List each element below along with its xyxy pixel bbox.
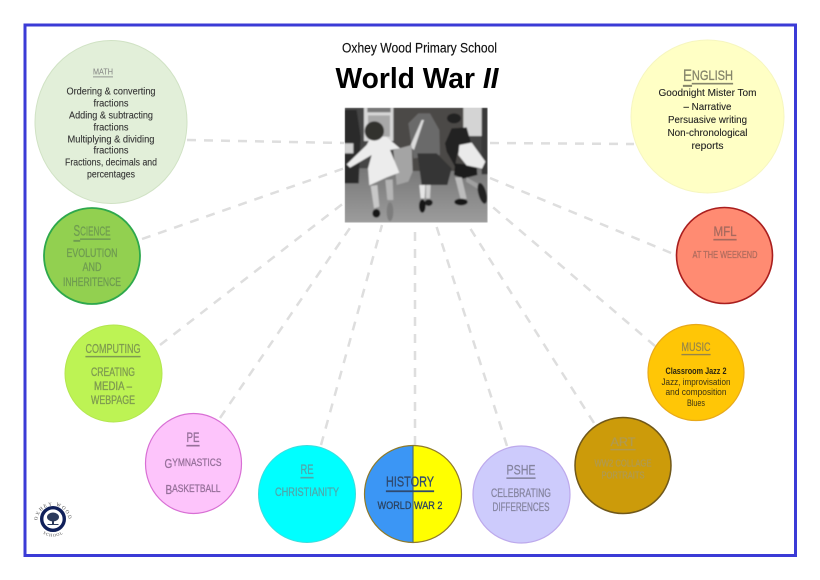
english topics: Non-chronological	[668, 127, 748, 139]
panel: pe	[146, 414, 242, 514]
mfl heading: MFL	[714, 223, 737, 239]
pshe heading: PSHE	[506, 462, 536, 478]
pe heading: PE	[186, 429, 200, 445]
english heading: ENGLISH	[683, 66, 733, 84]
pe topics	[164, 456, 222, 496]
math topics: fractions	[94, 146, 128, 156]
panel: music	[648, 324, 744, 420]
panel: history	[364, 446, 462, 542]
math topics: fractions	[94, 98, 128, 110]
pe topics: GYMNASTICS	[164, 456, 222, 470]
main title: World War II	[336, 63, 499, 95]
english topics: Persuasive writing	[668, 114, 747, 126]
math topics: Ordering & converting	[66, 86, 156, 98]
panel: pshe	[473, 446, 570, 543]
music topics: and composition	[666, 387, 726, 397]
panel: science	[44, 208, 140, 304]
art topic: WW2 COLLAGE	[594, 458, 652, 470]
math topics: Adding & subtracting	[69, 110, 153, 122]
panel: math	[35, 40, 187, 204]
panel: art	[575, 418, 671, 514]
math heading: MATH	[93, 68, 113, 76]
music topics: Blues	[687, 398, 705, 408]
mfl topic: AT THE WEEKEND	[692, 249, 758, 261]
pshe topic: CELEBRATING	[491, 488, 551, 500]
music heading: MUSIC	[682, 342, 710, 354]
science topic: EVOLUTION	[66, 248, 118, 260]
computing topic	[91, 367, 135, 407]
science topic: AND	[82, 262, 102, 274]
math topics: Multiplying & dividing	[68, 134, 154, 146]
icon: school logo: OXHEY WOOD	[34, 502, 72, 520]
music topics: Jazz, improvisation	[662, 377, 730, 387]
science topic	[63, 248, 121, 289]
science topic: INHERITENCE	[63, 277, 121, 289]
pshe topic: DIFFERENCES	[492, 502, 550, 514]
math topics	[65, 86, 157, 180]
school name heading: Oxhey Wood Primary School	[342, 40, 497, 56]
computing topic: MEDIA –	[94, 381, 132, 393]
computing topic: WEBPAGE	[91, 395, 135, 407]
dashed connector lines	[142, 140, 676, 446]
icon: school logo: SCHOOL	[43, 532, 62, 537]
computing heading: COMPUTING	[86, 342, 140, 356]
music topics: Classroom Jazz 2	[666, 366, 726, 376]
pshe topic	[491, 488, 551, 514]
english topics: Goodnight Mister Tom	[658, 87, 757, 99]
icon: school logo	[34, 502, 72, 537]
science heading: SCIENCE	[74, 222, 111, 240]
art topic	[594, 458, 652, 482]
history heading: HISTORY	[386, 474, 434, 490]
english topics: – Narrative	[684, 101, 732, 113]
panel: computing	[65, 325, 162, 422]
music topics	[662, 366, 730, 408]
history topic: WORLD WAR 2	[378, 500, 442, 512]
panel: mfl	[676, 208, 772, 304]
art heading: ART	[610, 435, 636, 449]
panel: re	[258, 446, 356, 542]
computing topic: CREATING	[91, 367, 135, 379]
art topic: PORTRAITS	[602, 470, 645, 482]
math topics: fractions	[94, 122, 128, 134]
math topics: Fractions, decimals and	[65, 158, 157, 168]
pe topics: BASKETBALL	[166, 482, 220, 496]
re topic: CHRISTIANITY	[275, 487, 339, 499]
re heading: RE	[300, 461, 314, 477]
photo: evacuee children running	[345, 108, 489, 223]
math topics: percentages	[87, 170, 135, 180]
english topics	[658, 87, 757, 152]
english topics: reports	[692, 140, 724, 152]
panel: english	[631, 40, 784, 193]
